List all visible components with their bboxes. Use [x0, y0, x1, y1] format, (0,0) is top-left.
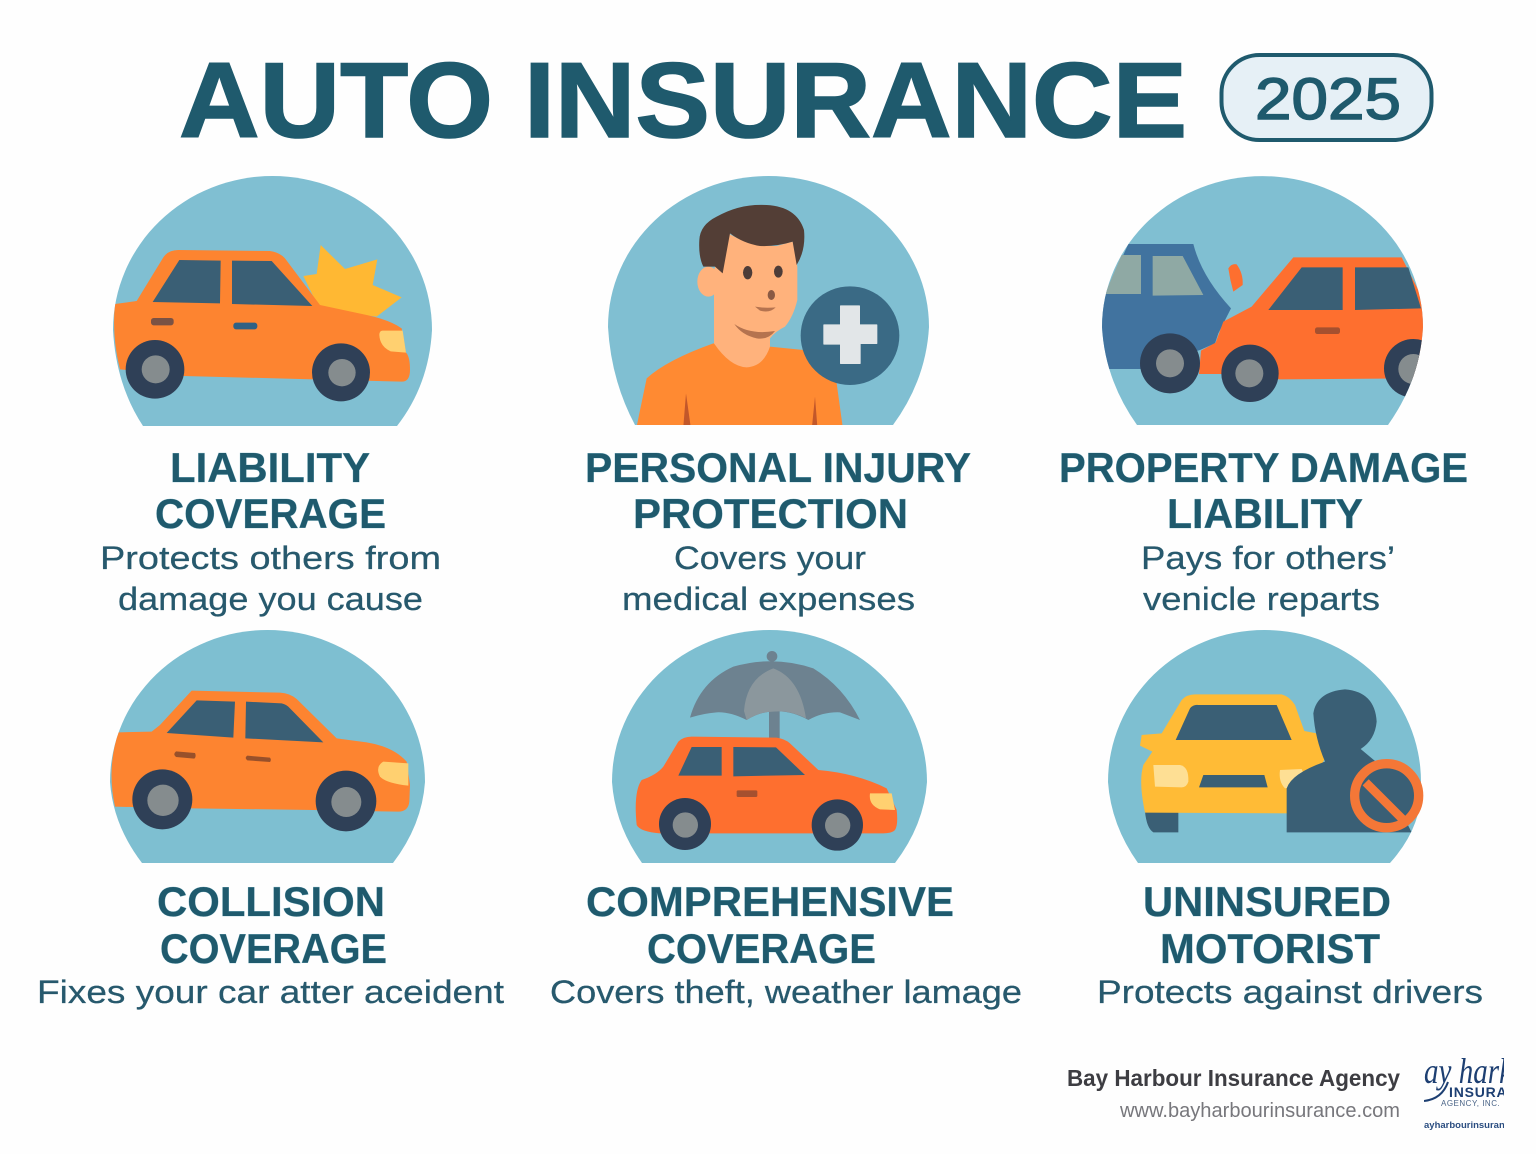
year badge: 2025 [1255, 67, 1401, 132]
description [100, 540, 441, 617]
footer: agency logo: AGENCY, INC. [1441, 1099, 1500, 1108]
heading: property damage liability: LIABILITY [1167, 490, 1363, 537]
icon: prohibition sign [1355, 764, 1419, 828]
heading: liability coverage: LIABILITY [170, 444, 370, 491]
heading: property damage liability: PROPERTY DAMAGE [1059, 444, 1468, 491]
heading: personal injury protection: PROTECTION [633, 490, 908, 537]
description: Covers your [674, 540, 866, 576]
heading: comprehensive coverage: COMPREHENSIVE [586, 878, 954, 925]
icon: yellow car and person [1108, 630, 1422, 863]
heading: personal injury protection [585, 444, 971, 537]
heading: uninsured motorist: MOTORIST [1160, 925, 1380, 972]
footer: agency name and website: www.bayharbourinsurance.com [1119, 1100, 1400, 1122]
year badge [1222, 55, 1432, 140]
heading: uninsured motorist: UNINSURED [1143, 878, 1391, 925]
heading: uninsured motorist [1143, 878, 1391, 972]
icon: car with impact burst [100, 170, 440, 430]
heading: collision coverage: COVERAGE [160, 925, 387, 972]
icon: car under umbrella [612, 630, 927, 863]
heading: comprehensive coverage [586, 878, 954, 972]
description: medical expenses [622, 581, 915, 617]
description: Covers theft, weather lamage [550, 974, 1022, 1010]
heading: collision coverage: COLLISION [157, 878, 385, 925]
footer: agency logo [1424, 1058, 1504, 1130]
description [622, 540, 915, 617]
heading: liability coverage: COVERAGE [155, 490, 386, 537]
panel: liability coverage [100, 170, 441, 617]
footer: agency logo: ayharbourinsurance [1424, 1120, 1515, 1131]
description: Pays for others’ [1141, 540, 1395, 576]
panel: personal injury protection [585, 170, 971, 617]
icon: orange sedan [110, 630, 425, 863]
description: Protects others from [100, 540, 441, 576]
panel: comprehensive coverage [550, 625, 1022, 1010]
heading: liability coverage [155, 444, 386, 537]
icon: two cars colliding [1102, 176, 1423, 425]
heading: comprehensive coverage: COVERAGE [647, 925, 876, 972]
description: Protects against drivers [1097, 974, 1483, 1010]
footer: agency logo: ay hark [1424, 1051, 1513, 1091]
panel: collision coverage [37, 625, 504, 1010]
heading: property damage liability [1059, 444, 1468, 537]
description: venicle reparts [1143, 581, 1380, 617]
title: AUTO INSURANCE [179, 40, 1187, 160]
panel: uninsured motorist [1095, 625, 1483, 1010]
icon: person with medical cross [600, 170, 940, 430]
heading: personal injury protection: PERSONAL INJURY [585, 444, 971, 491]
description [1141, 540, 1395, 617]
heading: collision coverage [157, 878, 387, 972]
footer: agency name and website: Bay Harbour Insurance Agency [1067, 1065, 1400, 1091]
footer: agency name and website [1067, 1065, 1400, 1122]
description: Fixes your car atter aceident [37, 974, 504, 1010]
description: damage you cause [118, 581, 423, 617]
panel: property damage liability [1059, 170, 1468, 617]
